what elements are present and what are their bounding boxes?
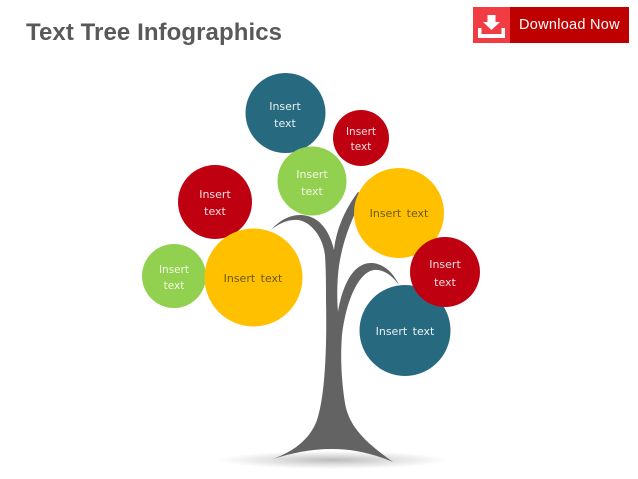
circle: green center: Insert xyxy=(296,168,328,181)
circle: yellow right xyxy=(354,168,444,258)
download button xyxy=(473,7,629,43)
circle: green left xyxy=(142,244,206,308)
circle: top teal: Insert xyxy=(269,100,301,113)
circle: teal lower right: Insert text xyxy=(376,325,435,338)
circle: green left: text xyxy=(164,280,184,292)
tree trunk and branches xyxy=(271,192,399,462)
circle: red left: text xyxy=(204,205,227,218)
circle: red right: Insert xyxy=(429,258,461,271)
icon: download xyxy=(473,7,510,43)
circle: red right xyxy=(410,237,480,307)
circle: top teal: text xyxy=(274,117,297,130)
circle: top teal xyxy=(246,73,326,153)
circle: red left xyxy=(178,165,252,239)
circle: red left: Insert xyxy=(199,188,231,201)
circle: yellow left xyxy=(204,228,302,326)
circle: red right: text xyxy=(434,276,457,289)
circle: green center xyxy=(278,146,346,216)
button label: Download Now xyxy=(519,17,620,33)
ground shadow xyxy=(218,451,448,469)
circle: yellow left: Insert text xyxy=(224,272,283,285)
circle: green left: Insert xyxy=(159,264,189,276)
title: Text Tree Infographics xyxy=(26,19,282,46)
circle: green center: text xyxy=(301,185,324,198)
circle: small red top xyxy=(333,110,389,166)
circle: small red top: text xyxy=(351,141,371,153)
circle: yellow right: Insert text xyxy=(370,207,429,220)
circle: small red top: Insert xyxy=(346,126,376,138)
circle: teal lower right xyxy=(360,285,450,376)
